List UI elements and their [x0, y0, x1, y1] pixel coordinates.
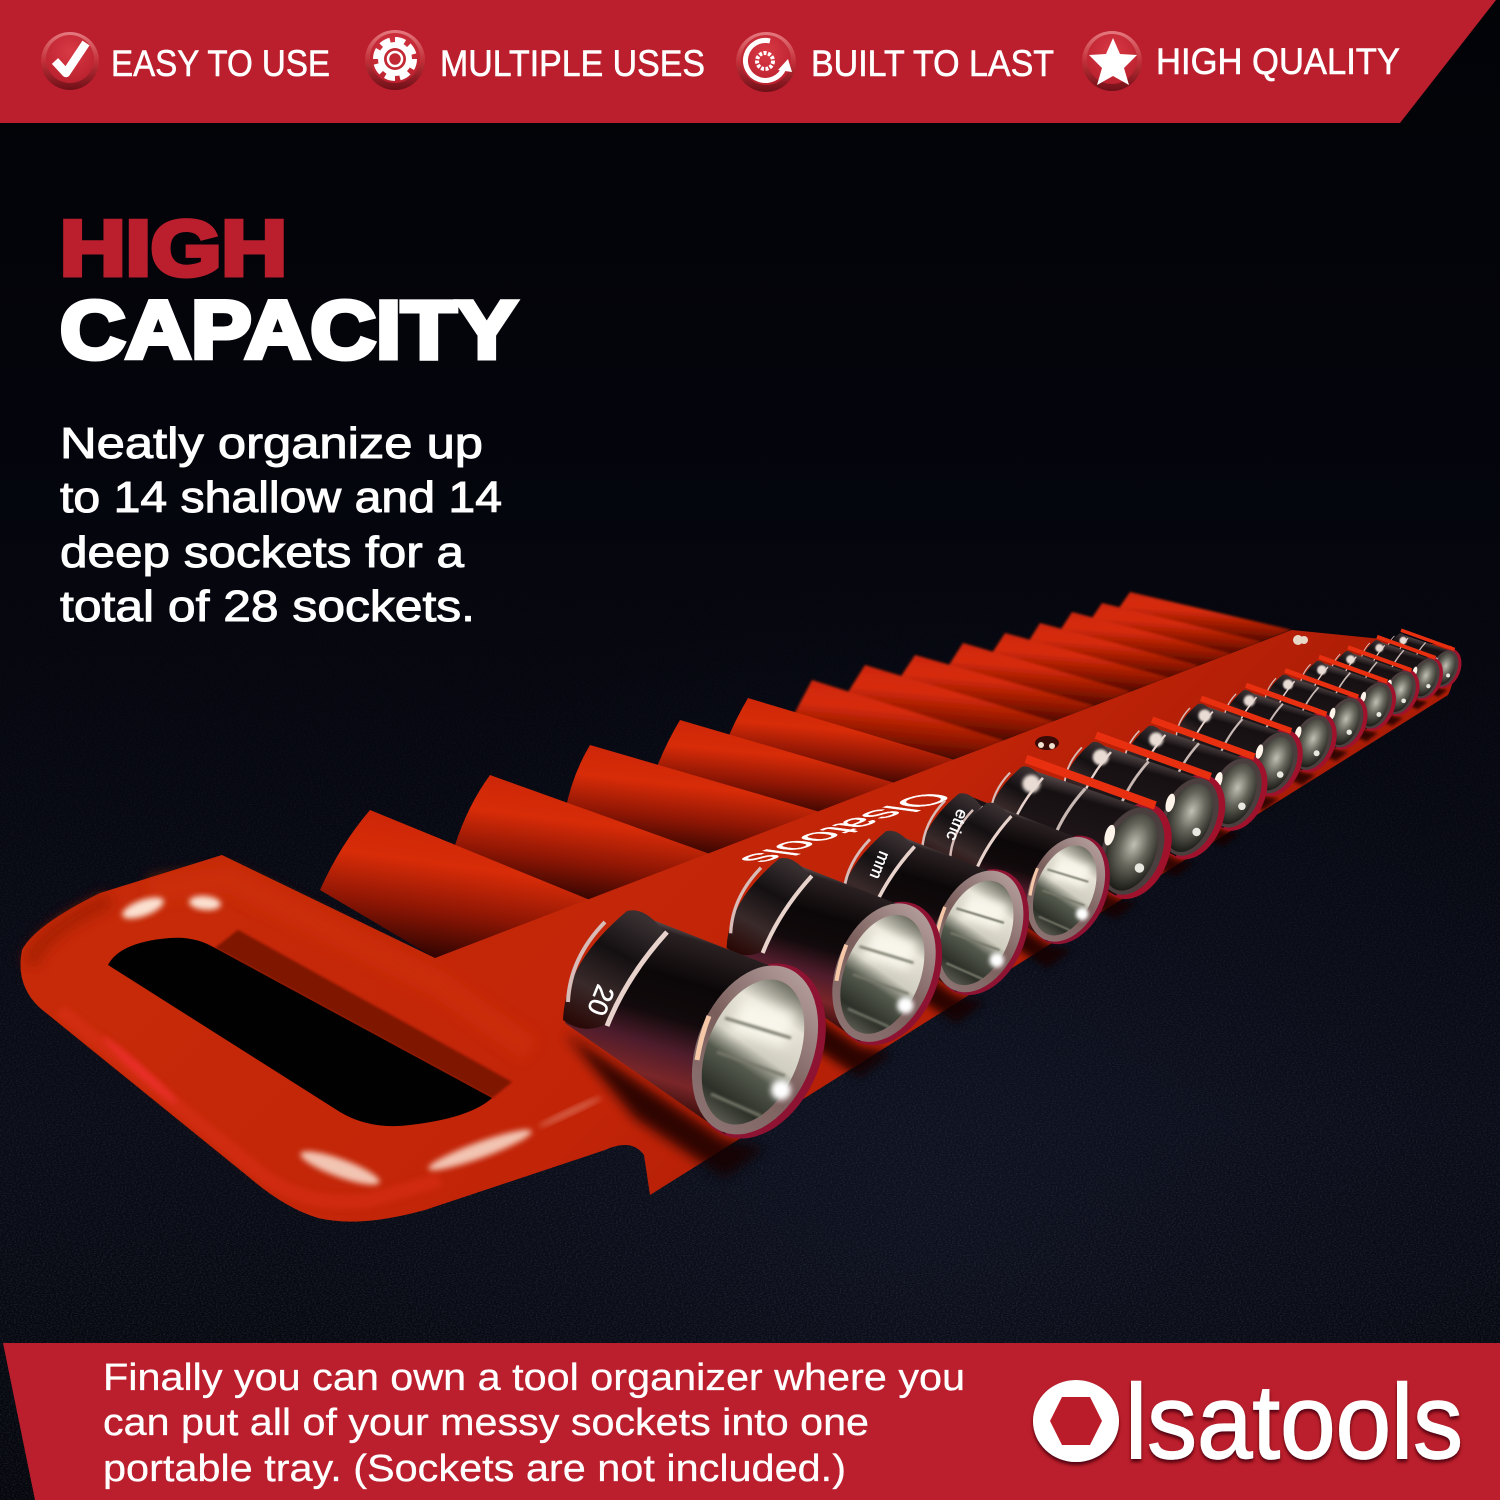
headline — [60, 204, 517, 376]
socket markings: mm — [866, 849, 894, 882]
handle hole — [108, 938, 492, 1126]
description text: deep sockets for a — [60, 528, 465, 577]
description text — [60, 419, 502, 631]
icon: cycle gear badge — [736, 32, 796, 92]
description text: total of 28 sockets. — [60, 582, 475, 631]
bottom text: Finally you can own a tool organizer where you — [103, 1357, 965, 1399]
feature: built to last — [736, 32, 1054, 92]
socket markings: 20 — [581, 981, 620, 1020]
tray logo: Olsatools — [726, 791, 966, 866]
logo: O — [1036, 1368, 1116, 1480]
socket markings — [581, 807, 972, 1020]
icon: gear badge — [365, 30, 425, 90]
fins: slotted tray ridges — [320, 592, 1292, 958]
handle shading — [30, 880, 530, 1202]
feature: built to last: BUILT TO LAST — [811, 43, 1054, 84]
top banner — [0, 0, 1496, 123]
logo: lsatools — [1125, 1363, 1463, 1481]
feature: high quality — [1082, 31, 1400, 91]
bottom text: can put all of your messy sockets into one — [103, 1402, 869, 1444]
feature: multiple uses — [365, 30, 705, 90]
feature: easy to use: EASY TO USE — [111, 43, 330, 84]
description text: to 14 shallow and 14 — [60, 473, 502, 522]
feature: multiple uses: MULTIPLE USES — [440, 43, 705, 84]
sockets row — [563, 630, 1467, 1178]
tray body and handle — [20, 630, 1454, 1222]
headline: CAPACITY — [60, 285, 517, 376]
description text: Neatly organize up — [60, 419, 483, 468]
bottom text: portable tray. (Sockets are not included.) — [103, 1448, 846, 1490]
rivet — [1035, 736, 1059, 750]
socket markings: etric — [942, 807, 972, 844]
feature: easy to use — [41, 32, 330, 90]
background fabric — [0, 664, 1500, 1500]
rear rivet — [1293, 635, 1308, 645]
socket tray — [20, 592, 1467, 1222]
icon: star badge — [1082, 31, 1142, 91]
handle highlights — [99, 893, 603, 1191]
bottom banner — [3, 1343, 1500, 1500]
bottom text — [103, 1357, 965, 1490]
headline: HIGH — [60, 204, 287, 292]
feature: high quality: HIGH QUALITY — [1156, 41, 1400, 82]
icon: check badge — [41, 32, 99, 90]
